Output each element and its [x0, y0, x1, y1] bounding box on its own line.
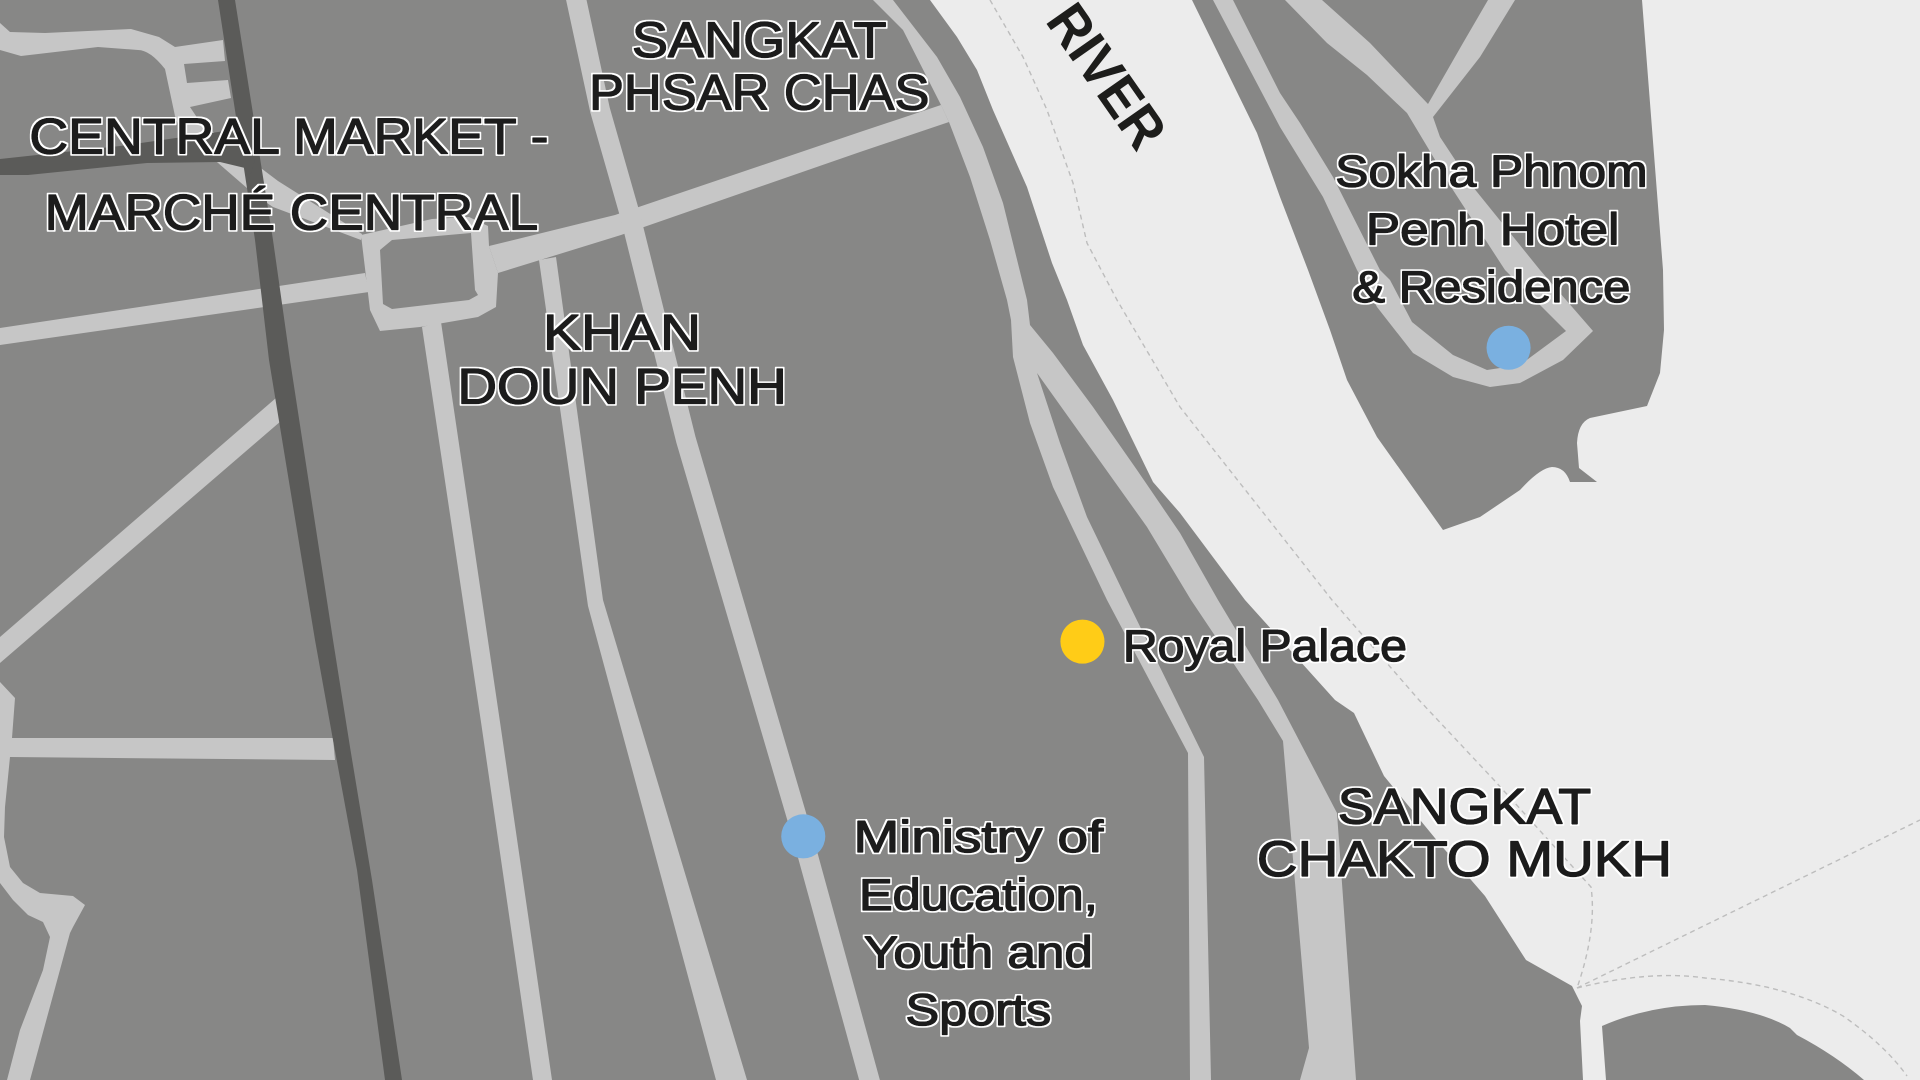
label: Ministry of Education, Youth and Sports: Ministry of	[853, 813, 1104, 862]
label: Sangkat Phsar Chas	[589, 12, 929, 121]
label: Ministry of Education, Youth and Sports: Sports	[906, 986, 1051, 1035]
label: Central Market: MARCHÉ CENTRAL	[45, 185, 538, 241]
label: Sokha Phnom Penh Hotel	[1335, 148, 1648, 312]
label: Sokha Phnom Penh Hotel: Penh Hotel	[1366, 205, 1619, 254]
label: Sangkat Phsar Chas: PHSAR CHAS	[589, 65, 929, 121]
label: Khan Doun Penh: KHAN	[543, 305, 701, 361]
land: south bank	[1602, 1005, 1864, 1080]
label: Ministry of Education, Youth and Sports: Youth and	[864, 928, 1093, 977]
label: Sangkat Chakto Mukh: CHAKTO MUKH	[1257, 831, 1672, 887]
marker: Ministry of Education	[781, 814, 825, 858]
label: Sangkat Phsar Chas: SANGKAT	[632, 12, 887, 68]
label: Sokha Phnom Penh Hotel: & Residence	[1352, 263, 1630, 312]
label: Ministry of Education, Youth and Sports	[853, 813, 1104, 1035]
marker: Sokha Hotel	[1487, 326, 1531, 370]
land: island	[1192, 0, 1664, 530]
label: Sangkat Chakto Mukh: SANGKAT	[1338, 778, 1591, 834]
label: Sokha Phnom Penh Hotel: Sokha Phnom	[1335, 148, 1648, 197]
label: Khan Doun Penh: DOUN PENH	[457, 358, 787, 414]
label: Royal Palace: Royal Palace	[1123, 622, 1407, 671]
label: Khan Doun Penh	[457, 305, 787, 414]
label: Sangkat Chakto Mukh	[1257, 778, 1672, 887]
label: Ministry of Education, Youth and Sports: Education,	[859, 871, 1098, 920]
railway	[0, 0, 402, 1080]
label: Central Market: CENTRAL MARKET -	[29, 109, 549, 165]
label: Central Market	[29, 109, 549, 241]
marker: Royal Palace	[1060, 620, 1104, 664]
river channel lines	[990, 0, 1920, 1076]
